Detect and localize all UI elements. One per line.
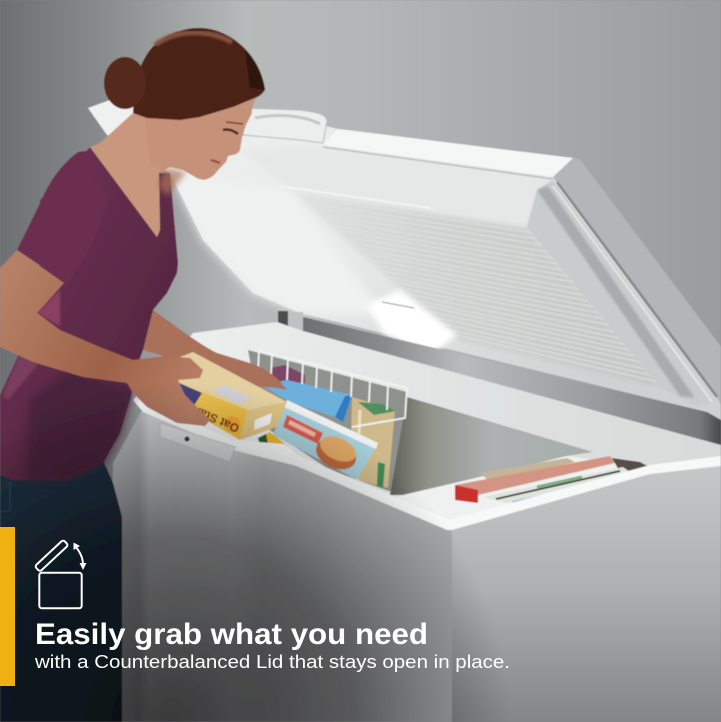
barcode label [254, 413, 272, 430]
hair bun [104, 57, 146, 109]
rotation arrow [74, 542, 86, 570]
lid ribs [297, 196, 655, 381]
lid inner bevel [527, 180, 712, 406]
handle [243, 108, 327, 143]
torso [0, 147, 178, 480]
eyebrow [226, 122, 243, 124]
jeans seam [0, 482, 10, 512]
front white lip [133, 400, 721, 530]
glare detail [382, 302, 414, 308]
box front [177, 382, 248, 440]
headline: Easily grab what you need [35, 618, 428, 651]
interior left behind basket [248, 350, 407, 495]
lid top inner ledge [240, 147, 553, 227]
handle slot [255, 116, 320, 124]
red labels [283, 415, 323, 444]
box top [177, 352, 287, 410]
top label [212, 385, 252, 404]
shirt pink light lower [2, 354, 38, 400]
blue stripe [512, 492, 557, 502]
green stripe [537, 477, 582, 487]
pink box [455, 456, 615, 495]
blue bag [262, 380, 352, 422]
hair [133, 28, 265, 120]
lid bevel shadow [537, 186, 695, 398]
interior wall [390, 397, 593, 495]
shirt pink light upper [37, 290, 60, 326]
red box end [455, 485, 478, 503]
white lower pack [483, 467, 630, 503]
icon: open lid box [35, 540, 86, 608]
beige boxes [350, 397, 395, 488]
yellow box [177, 352, 287, 440]
ledge highlight [280, 186, 430, 208]
dark stripe [496, 471, 620, 499]
woman [0, 28, 265, 722]
eye [223, 130, 238, 134]
lid base [88, 100, 721, 425]
purple label [177, 382, 202, 407]
box divider [357, 410, 360, 480]
oat badge [224, 416, 240, 432]
green side stripe [377, 462, 385, 488]
interior packages [455, 456, 630, 503]
subheading: with a Counterbalanced Lid that stays open in place. [34, 651, 510, 672]
lid frame groove [557, 182, 717, 397]
wire basket [257, 350, 407, 427]
dark gap [612, 458, 651, 472]
icon box [39, 573, 82, 608]
lid top strip crease [323, 147, 553, 179]
neck [90, 113, 190, 237]
face [145, 97, 257, 180]
purple tub [270, 365, 305, 383]
near arm [0, 250, 210, 426]
hair dark front [245, 50, 265, 90]
recess hole [184, 436, 190, 442]
front recess handle [160, 423, 235, 462]
basket and food [257, 350, 407, 488]
neck shadow [158, 168, 186, 196]
green lid label [358, 402, 396, 415]
icon lid [35, 540, 68, 572]
interior floor [395, 456, 650, 522]
waffle box [273, 400, 378, 480]
seal strip [303, 317, 721, 447]
lid left bright wash [170, 173, 385, 315]
waffle sandwich [311, 433, 361, 475]
freezer right side face [452, 460, 721, 722]
lid frame band [553, 158, 721, 405]
lid top strip [323, 129, 573, 177]
lid light glare [367, 290, 457, 356]
box brand text: Oat Starts [183, 399, 241, 436]
lid frame light [553, 186, 712, 402]
mouth [211, 160, 220, 163]
freezer front face [108, 408, 452, 722]
blue bag dark fold [335, 395, 352, 422]
lid [88, 100, 721, 425]
shirt shadow [25, 370, 132, 480]
hair highlight [155, 33, 232, 45]
freezer rim [133, 322, 721, 527]
lid inner panel [290, 190, 660, 387]
back arm [143, 310, 287, 390]
bottom dark overlay [0, 382, 510, 722]
box side [240, 402, 287, 440]
beige back box [480, 458, 575, 482]
interior [248, 350, 651, 522]
yellow accent bar [0, 527, 15, 686]
hinge [278, 311, 303, 331]
jeans [0, 460, 122, 722]
green and yellow items [258, 432, 288, 452]
sleeve [17, 150, 107, 283]
